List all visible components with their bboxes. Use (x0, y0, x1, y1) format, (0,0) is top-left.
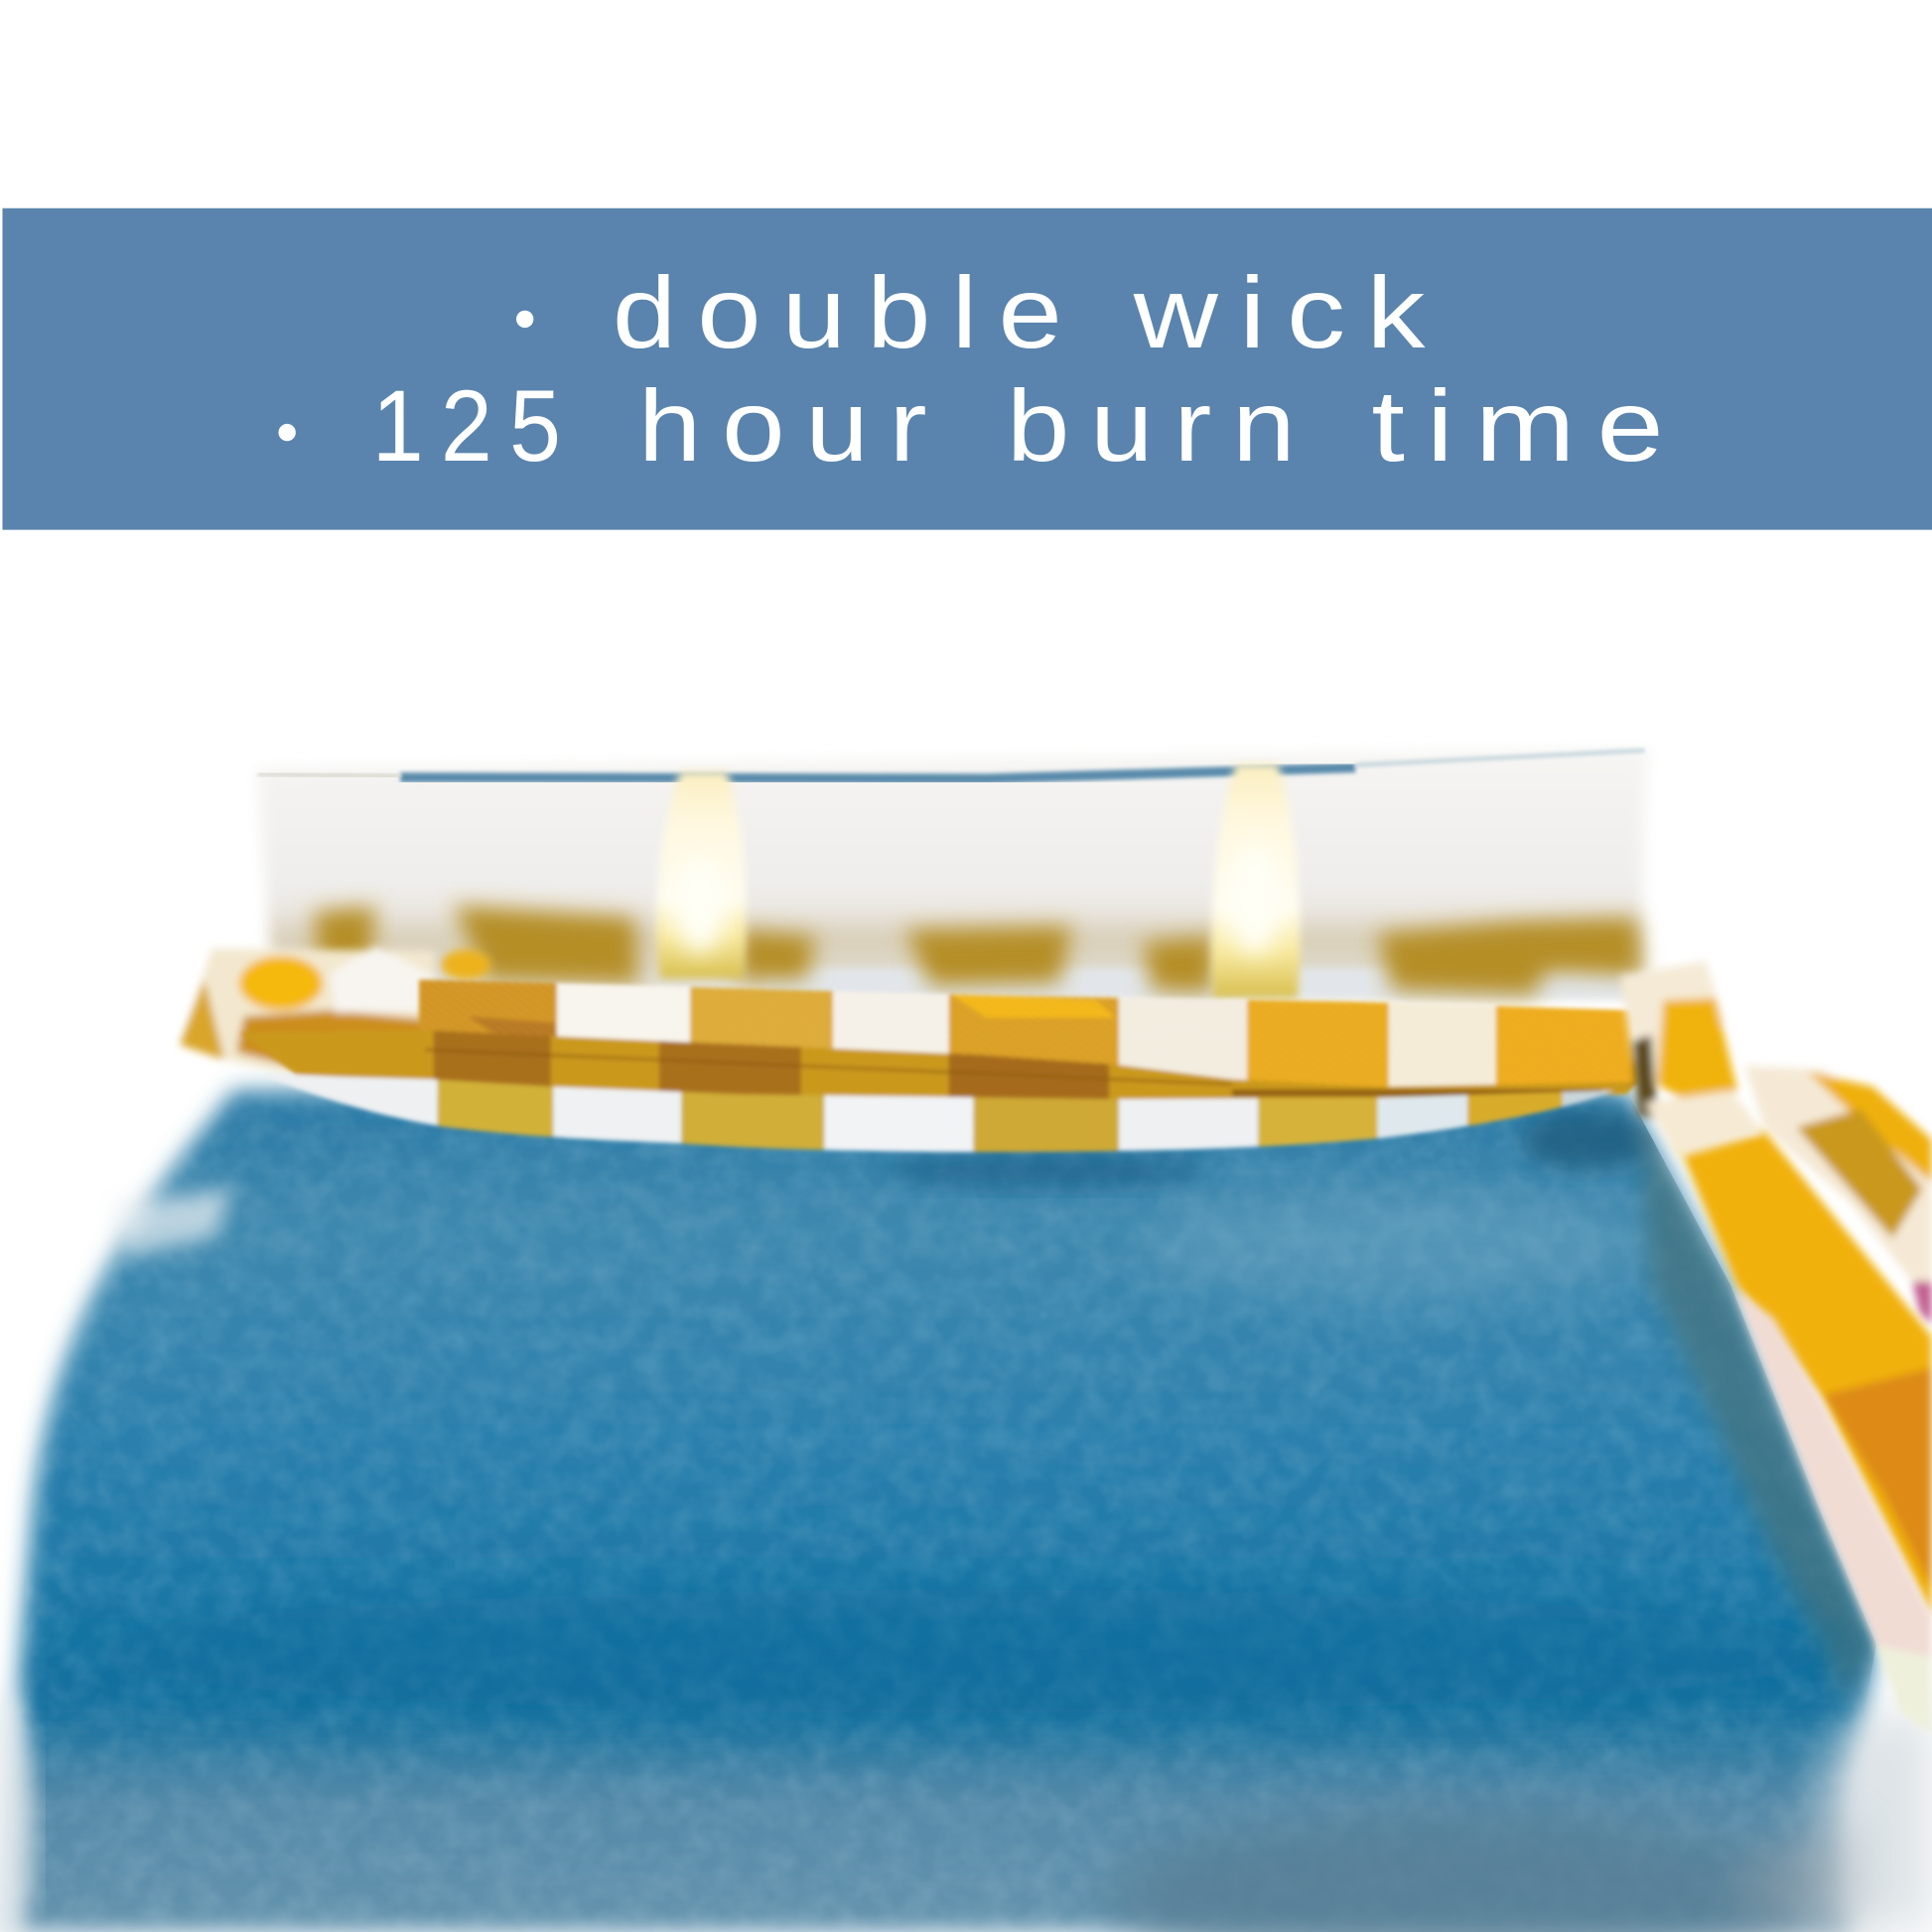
ribbon left end (180, 946, 490, 1078)
ribbon front tail (1677, 1131, 1932, 1616)
white strip under tail (1734, 1289, 1932, 1734)
text: double wick: wick (1133, 256, 1447, 369)
glass rim (257, 750, 1649, 998)
text: 125 hour burn time: burn (1007, 369, 1315, 483)
text: 125 hour burn time: time (1371, 369, 1686, 483)
banner background (2, 208, 1932, 530)
ribbon lower band checks (252, 1072, 1624, 1159)
left flame (656, 771, 746, 978)
ribbon bands wrapper (239, 976, 1640, 1156)
bullet: double wick (516, 311, 533, 328)
mustard reflection in glass (314, 905, 1641, 996)
text: double wick: double (613, 256, 1083, 369)
bullet: burn time (278, 424, 296, 441)
text: 125 hour burn time: hour (638, 369, 947, 483)
gingham ribbon around neck (0, 946, 1932, 1734)
ribbon upper band checks (415, 976, 1640, 1091)
blue wax body (0, 1084, 1932, 1932)
right flame (1211, 763, 1301, 998)
text: double wick (613, 256, 1447, 369)
text: 125 hour burn time: 125 (372, 369, 578, 483)
text: 125 hour burn time (372, 369, 1686, 483)
ribbon knot (1620, 961, 1764, 1159)
banner (2, 208, 1932, 530)
ribbon rear tail (1744, 1066, 1932, 1324)
ribbon middle shadow band (234, 1023, 1651, 1109)
